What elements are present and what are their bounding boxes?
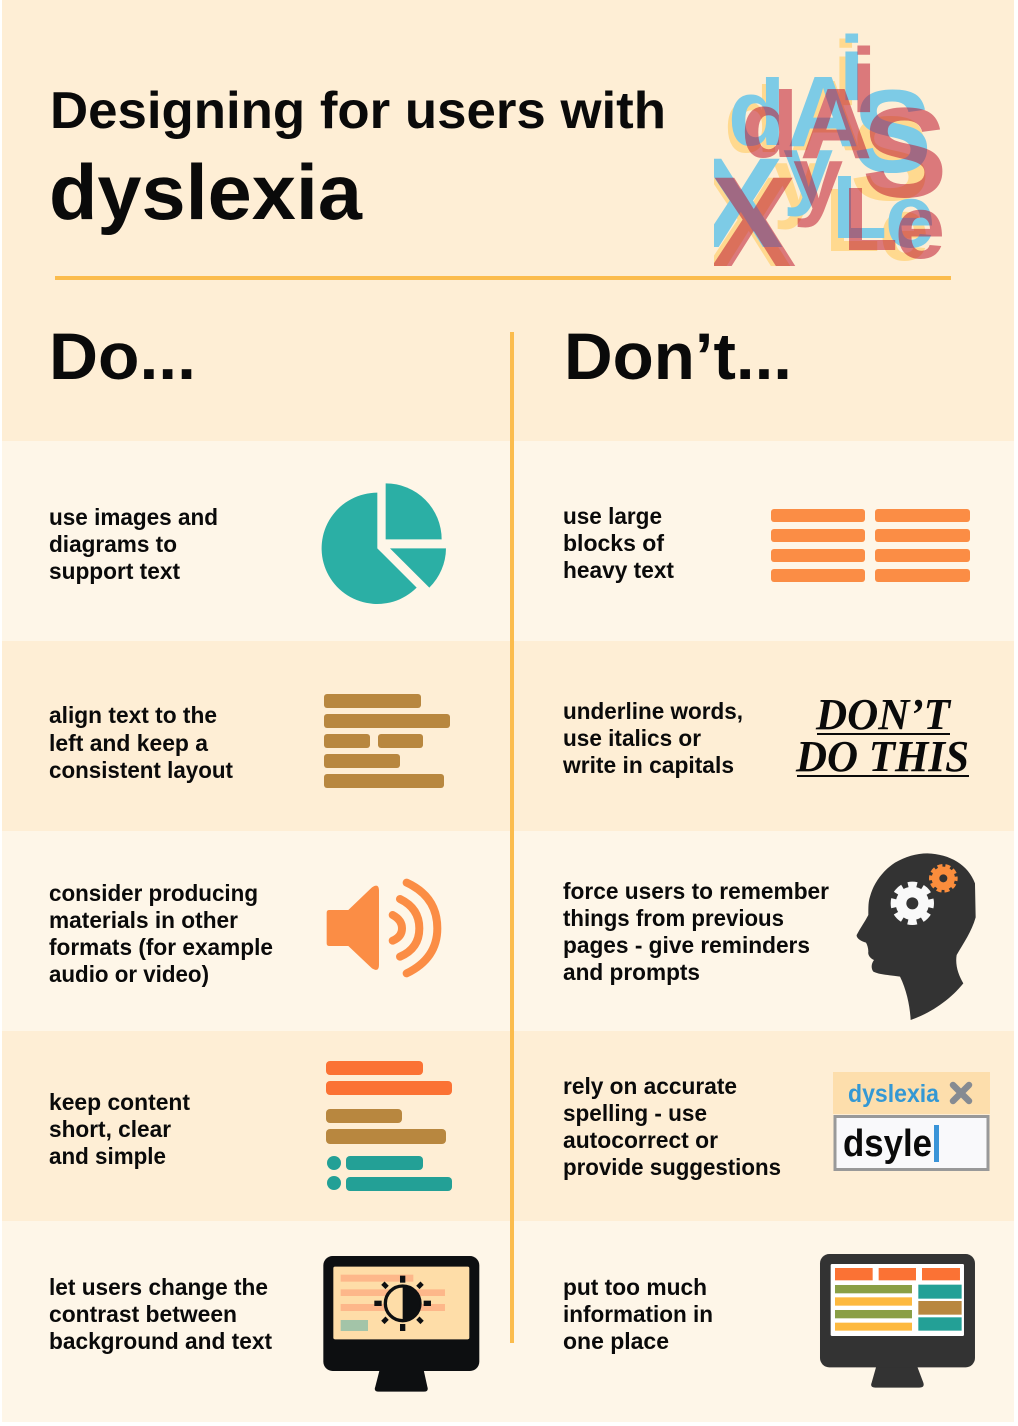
don't text: blocks: heavy text bbox=[563, 557, 674, 583]
logo: overlapping letters: i bbox=[833, 23, 859, 125]
do text: images: use images and bbox=[49, 504, 218, 530]
logo: overlapping letters: y bbox=[793, 129, 843, 229]
do text: align bbox=[49, 702, 233, 783]
do text: images bbox=[49, 504, 218, 584]
icon: coloured content bars bbox=[326, 1061, 452, 1191]
example: don't do this: DON’T bbox=[815, 690, 952, 739]
don't text: spelling: autocorrect or bbox=[563, 1127, 718, 1153]
don't text: spelling: provide suggestions bbox=[563, 1154, 781, 1180]
logo: overlapping letters: X bbox=[711, 151, 796, 294]
don't text: underline: use italics or bbox=[563, 725, 701, 751]
logo: overlapping letters: S bbox=[853, 66, 932, 198]
logo: overlapping letters: d bbox=[724, 67, 781, 172]
icon: pie chart bbox=[322, 483, 446, 604]
autocorrect example bbox=[833, 1072, 990, 1170]
do text: short: and simple bbox=[49, 1143, 166, 1169]
heading: do: Do... bbox=[49, 319, 196, 393]
icon: monitor with contrast control bbox=[323, 1256, 479, 1392]
logo: overlapping letters: A bbox=[787, 56, 859, 168]
do text: align: left and keep a bbox=[49, 730, 208, 756]
don't text: memory: force users to remember bbox=[563, 878, 829, 904]
logo: overlapping letters: y bbox=[783, 118, 833, 218]
do text: align: consistent layout bbox=[49, 757, 233, 783]
logo: overlapping letters: d bbox=[741, 72, 798, 177]
do text: contrast bbox=[49, 1274, 272, 1354]
example: don't do this bbox=[795, 690, 969, 781]
example: don't do this: DO THIS bbox=[795, 732, 969, 781]
logo: overlapping letters: L bbox=[832, 158, 887, 258]
logo: overlapping letters bbox=[714, 34, 942, 266]
don't text: spelling: rely on accurate bbox=[563, 1073, 737, 1099]
logo: overlapping letters: e bbox=[895, 178, 945, 278]
logo: overlapping letters: A bbox=[800, 68, 872, 180]
don't text: memory bbox=[563, 878, 829, 985]
do text: short bbox=[49, 1089, 190, 1169]
do text: formats: audio or video) bbox=[49, 961, 209, 987]
don't text: blocks: use large bbox=[563, 503, 662, 529]
don't text: blocks: blocks of bbox=[563, 530, 664, 556]
logo: overlapping letters: i bbox=[839, 18, 865, 120]
heading: don't: Don’t... bbox=[564, 319, 792, 393]
do text: formats: formats (for example bbox=[49, 934, 273, 960]
logo: overlapping letters: A bbox=[790, 60, 862, 172]
don't text: underline bbox=[562, 698, 743, 778]
do text: contrast: background and text bbox=[49, 1328, 272, 1354]
logo: overlapping letters: d bbox=[728, 60, 785, 165]
logo: overlapping letters: L bbox=[825, 171, 880, 271]
icon: left aligned bars bbox=[324, 694, 450, 788]
logo: overlapping letters: i bbox=[851, 30, 877, 132]
don't text: underline: write in capitals bbox=[562, 752, 734, 778]
logo: overlapping letters: X bbox=[698, 132, 783, 275]
do text: contrast: contrast between bbox=[49, 1301, 237, 1327]
don't text: spelling: spelling - use bbox=[563, 1100, 707, 1126]
title: dyslexia bbox=[49, 148, 363, 236]
title bbox=[49, 82, 666, 236]
don't text: too much bbox=[563, 1274, 713, 1354]
don't text: too much: put too much bbox=[563, 1274, 707, 1300]
autocorrect example: dsyle bbox=[843, 1123, 932, 1165]
don't text: underline: underline words, bbox=[563, 698, 743, 724]
don't text: memory: and prompts bbox=[563, 959, 700, 985]
logo: overlapping letters: S bbox=[850, 92, 930, 226]
do text: images: diagrams to bbox=[49, 531, 177, 557]
icon: speaker bbox=[327, 883, 437, 973]
logo: overlapping letters: X bbox=[706, 151, 791, 294]
logo: overlapping letters: e bbox=[885, 167, 935, 267]
do text: short: keep content bbox=[49, 1089, 190, 1115]
do text: formats bbox=[49, 880, 273, 987]
don't text: spelling bbox=[563, 1073, 781, 1180]
don't text: blocks bbox=[563, 503, 674, 583]
icon: head with gears bbox=[857, 853, 976, 1020]
icon: monitor with crowded content bbox=[820, 1254, 975, 1388]
logo: overlapping letters: S bbox=[862, 82, 947, 225]
do text: align: align text to the bbox=[49, 702, 217, 728]
do text: contrast: let users change the bbox=[49, 1274, 268, 1300]
column divider bbox=[510, 332, 514, 1343]
do text: short: short, clear bbox=[49, 1116, 171, 1142]
logo: overlapping letters: L bbox=[843, 170, 898, 270]
don't text: memory: pages - give reminders bbox=[563, 932, 810, 958]
don't text: memory: things from previous bbox=[563, 905, 784, 931]
logo: overlapping letters: y bbox=[773, 131, 823, 231]
don't text: too much: information in bbox=[563, 1301, 713, 1327]
do text: formats: consider producing bbox=[49, 880, 258, 906]
header divider bbox=[55, 276, 951, 280]
icon: heavy text blocks bbox=[771, 509, 970, 582]
autocorrect example: dyslexia bbox=[848, 1080, 940, 1108]
do text: formats: materials in other bbox=[49, 907, 238, 933]
title: Designing for users with bbox=[50, 82, 666, 140]
do text: images: support text bbox=[49, 558, 180, 584]
don't text: too much: one place bbox=[563, 1328, 669, 1354]
logo: overlapping letters: e bbox=[879, 180, 929, 280]
